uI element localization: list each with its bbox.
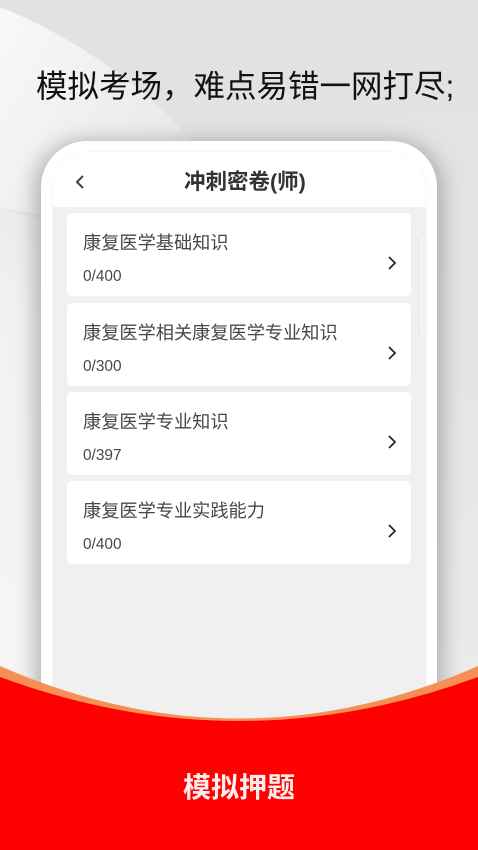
icon: chevron	[388, 256, 396, 270]
card title: 康复医学相关康复医学专业知识	[83, 323, 338, 343]
title: 模拟考场，难点易错一网打尽;	[36, 68, 454, 104]
footer label: 模拟押题	[183, 772, 295, 803]
card count: 0/400	[83, 536, 122, 553]
card title: 康复医学基础知识	[83, 233, 229, 253]
icon: chevron	[388, 346, 396, 360]
phone screen	[53, 152, 426, 761]
card count: 0/397	[83, 447, 122, 464]
card count: 0/300	[83, 358, 122, 375]
card title: 康复医学专业知识	[83, 412, 229, 432]
card title: 康复医学专业实践能力	[83, 501, 265, 521]
screen header	[53, 152, 426, 207]
side handle	[418, 234, 432, 338]
screen heading: 冲刺密卷(师)	[184, 170, 306, 194]
list card 4	[67, 481, 411, 564]
icon: back arrow	[76, 175, 84, 189]
card count: 0/400	[83, 268, 122, 285]
icon: chevron	[388, 524, 396, 538]
red curved footer band	[0, 666, 478, 850]
list card 1	[67, 213, 411, 296]
list card 2	[67, 303, 411, 386]
list card 3	[67, 392, 411, 475]
phone mockup	[41, 141, 437, 761]
icon: chevron	[388, 435, 396, 449]
